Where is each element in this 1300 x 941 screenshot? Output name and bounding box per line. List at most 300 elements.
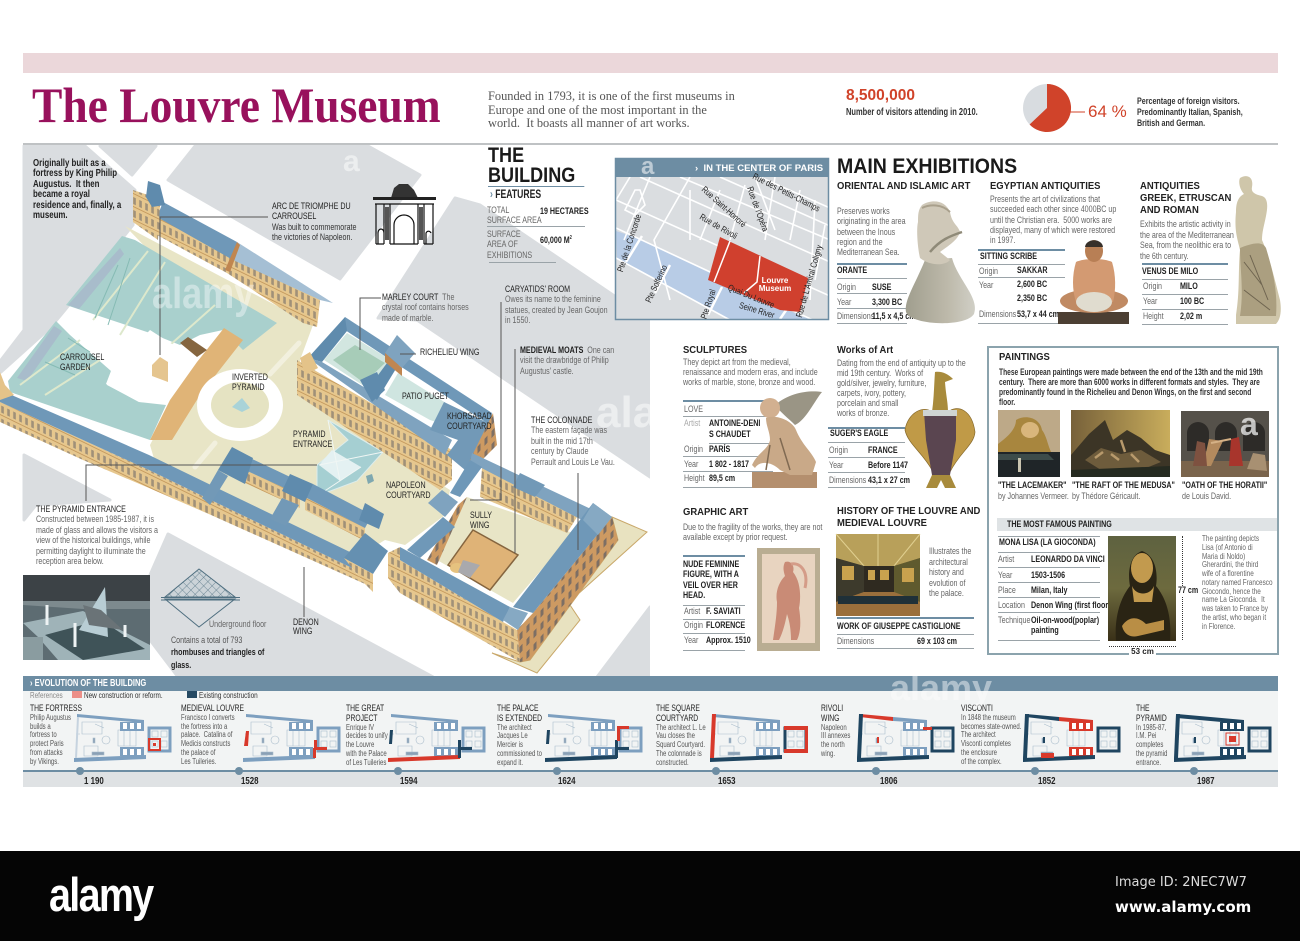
footer url: www.alamy.com: [1115, 898, 1251, 916]
step: Visconti: In 1848 the museum: [961, 713, 1016, 722]
caption: The Lacemaker: by Johannes Vermeer.: [998, 491, 1069, 502]
step: Rivoli Wing: the north: [821, 740, 845, 749]
foreign visitors note: Predominantly Italian, Spanish,: [1137, 107, 1243, 118]
year 1594: 1594: [400, 775, 418, 787]
panel: Oriental and Islamic art: 3,300 BC: [872, 297, 902, 308]
note: fortress origin: museum.: [33, 209, 68, 221]
label: Patio Puget: PATIO PUGET: [402, 391, 449, 402]
pie chart: 64% foreign visitors: [1023, 84, 1085, 132]
label: Inverted Pyramid: INVERTED: [232, 372, 268, 383]
label: Khorsabad Courtyard: COURTYARD: [447, 421, 491, 432]
paintings intro: These European paintings were made between the end of the 13th and the mid 19th: [999, 367, 1263, 377]
dimension: 53 cm: 53 cm: [1131, 647, 1154, 656]
label: Napoleon Courtyard: COURTYARD: [386, 490, 430, 501]
map labels: Seine River: [738, 300, 776, 321]
panel: Egyptian antiquities: Year: [979, 280, 993, 291]
label: Pyramid Entrance: PYRAMID: [293, 429, 325, 440]
label: Arc de Triomphe du Carrousel: ARC DE TRIOMPHE DU: [272, 201, 351, 212]
caption: The Raft of the Medusa: [1072, 480, 1175, 502]
panel: Oriental and Islamic art: originating in the area: [837, 216, 906, 227]
panel: Works of Art: mid 19th century. Works of: [837, 368, 923, 379]
label: Marley Court: made of marble.: [382, 313, 433, 324]
label: Carrousel Garden: GARDEN: [60, 362, 90, 373]
Mona Lisa data table: painting: [1031, 625, 1059, 636]
map labels: Quai Du Louvre: [726, 283, 776, 310]
step: The Pyramid: In 1985-87,: [1136, 723, 1166, 732]
label: The Colonnade: built in the mid 17th: [531, 436, 593, 447]
step: The Great Project: decides to unify: [346, 731, 388, 740]
step: The Palace is Extended: [497, 704, 542, 768]
step: The Palace is Extended: Jacques Le: [497, 731, 528, 740]
Carrousel garden: [8, 236, 277, 440]
step: Medieval Louvre: Medicis constructs: [181, 739, 230, 748]
heading: The Building: BUILDING: [488, 164, 575, 187]
step: Medieval Louvre: palace. Catalina of: [181, 730, 232, 739]
legend: Existing construction: [199, 691, 258, 700]
panel: History of the Louvre: architectural: [929, 557, 968, 568]
caption: The Raft of the Medusa: by Thédore Géricault.: [1072, 491, 1140, 502]
step: The Palace is Extended: IS EXTENDED: [497, 713, 542, 723]
step: The Pyramid: the pyramid: [1136, 749, 1167, 758]
glass pyramid: [317, 420, 383, 496]
step: The Pyramid: entrance.: [1136, 758, 1161, 767]
cutaway illustration of the Louvre: [0, 145, 650, 676]
statue: Venus de Milo: [1236, 176, 1281, 324]
panel: Graphic Art: F. SAVIATI: [706, 606, 741, 617]
panel: Sculptures: renaissance and modern eras, and include: [683, 367, 818, 378]
label: The Colonnade: century by Claude: [531, 446, 588, 457]
painting: The Raft of the Medusa: [1071, 410, 1170, 477]
panel: Oriental and Islamic art: Year: [837, 297, 851, 308]
foreign visitors note: Percentage of foreign visitors.: [1137, 96, 1240, 107]
panel: Antiquities Greek, Etruscan and Roman: MILO: [1180, 281, 1198, 292]
label: Caryatids' Room: statues, created by Jean Goujon: [505, 305, 608, 316]
panel: Graphic Art: Year: [684, 635, 698, 646]
watermark: ala (right of building): ala: [596, 388, 657, 437]
label: Napoleon Courtyard: [386, 480, 430, 501]
panel: Works of Art: Works of Art: [837, 344, 893, 356]
label: Marley Court: crystal roof contains horses: [382, 302, 469, 313]
step: Rivoli Wing: RIVOLI: [821, 703, 843, 713]
intro text: Founded in 1793, it is one of the first museums in: [488, 89, 735, 103]
panel: Works of Art: carpets, ivory, pottery,: [837, 388, 906, 399]
label: The Colonnade: [531, 415, 615, 468]
panel: Graphic Art: VEIL OVER HER: [683, 580, 738, 591]
step: Rivoli Wing: III annexes: [821, 731, 850, 740]
panel: Sculptures: LOVE: [684, 404, 703, 415]
features table: › FEATURES: [490, 189, 541, 201]
panel: History of the Louvre: evolution of: [929, 578, 965, 589]
panel: Paintings: [987, 346, 1279, 655]
Mona Lisa data table: Artist: [998, 554, 1014, 565]
label: Caryatids' Room: CARYATIDS' ROOM: [505, 284, 570, 295]
panel: Graphic Art: FLORENCE: [706, 620, 745, 631]
icon: triumphal arch: [373, 184, 436, 245]
watermark: alamy (building): alamy: [152, 269, 254, 318]
panel: Antiquities Greek, Etruscan and Roman: ANTIQUITIES: [1140, 180, 1200, 192]
panel: Graphic Art: GRAPHIC ART: [683, 506, 748, 518]
label: Marley Court: [382, 292, 469, 324]
step: The Great Project: PROJECT: [346, 713, 378, 723]
locator map: [614, 158, 830, 321]
step: The Palace is Extended: commissioned to: [497, 749, 542, 758]
panel: Antiquities Greek, Etruscan and Roman: VENUS DE MILO: [1142, 266, 1198, 277]
map labels: Rue de Rivoli: [698, 212, 739, 241]
features table: 19 HECTARES: [540, 206, 589, 217]
step: The Square Courtyard: The architect L. Le: [656, 723, 706, 732]
title: The Louvre Museum: [32, 77, 441, 133]
panel: History of the Louvre: WORK OF GIUSEPPE CASTIGLIONE: [837, 621, 961, 632]
step: The Fortress: builds a: [30, 722, 51, 731]
step: The Square Courtyard: The colonnade is: [656, 749, 702, 758]
label: Inverted Pyramid: PYRAMID: [232, 382, 264, 393]
callout lines: [86, 217, 578, 617]
pie percentage: 64 %: [1088, 102, 1127, 121]
label: Carrousel Garden: [60, 352, 104, 373]
panel: History of the Louvre: history and: [929, 567, 964, 578]
map labels: Louvre: [762, 276, 789, 285]
panel: Graphic Art: [683, 506, 822, 651]
panel: Sculptures: 89,5 cm: [709, 473, 735, 484]
Mona Lisa data table: 1503-1506: [1031, 570, 1065, 581]
step: The Pyramid: [1136, 704, 1167, 768]
Seine river: [616, 231, 808, 319]
step: Medieval Louvre: the fortress into a: [181, 722, 227, 731]
panel: Oriental and Islamic art: Preserves works: [837, 206, 890, 217]
footer band: [0, 851, 1300, 941]
label: Pyramid Entrance: ENTRANCE: [293, 439, 332, 450]
panel: Works of Art: Origin: [829, 445, 848, 456]
map labels: Rue des Petits-Champs: [751, 171, 822, 214]
panel: Egyptian antiquities: displayed, many of which were restored: [990, 225, 1115, 236]
paintings intro: century. There are more than 6000 works in different formats and styles. They are: [999, 377, 1260, 387]
panel: Egyptian antiquities: SITTING SCRIBE: [980, 251, 1037, 262]
step: The Square Courtyard: constructed.: [656, 758, 689, 767]
intro text: [488, 89, 735, 130]
panel: Egyptian antiquities: Dimensions: [979, 309, 1016, 320]
plan: 1624: [545, 714, 641, 762]
label: The Pyramid Entrance: reception area below.: [36, 556, 104, 567]
step: The Palace is Extended: expand it.: [497, 758, 523, 767]
Mona Lisa description: Lisa (of Antonio di: [1202, 542, 1253, 552]
step: Medieval Louvre: [181, 704, 244, 767]
step: Medieval Louvre: Francisco I converts: [181, 713, 235, 722]
header bar: [23, 53, 1278, 73]
watermark: a (top block): a: [343, 145, 360, 178]
panel: Sculptures: Artist: [684, 418, 700, 429]
Mona Lisa data table: Place: [998, 585, 1016, 596]
panel: Sculptures: Year: [684, 459, 698, 470]
panel: Works of Art: gold/silver, jewelry, furniture,: [837, 378, 926, 389]
grey city blocks: [1, 146, 650, 677]
step: The Fortress: THE FORTRESS: [30, 703, 82, 713]
panel: Works of Art: 43,1 x 27 cm: [868, 475, 910, 486]
note: rhombuses: Contains a total of 793: [171, 635, 242, 646]
panel: Oriental and Islamic art: Dimensions: [837, 311, 874, 322]
heading: The Building: [488, 146, 584, 187]
panel: Sculptures: [683, 344, 818, 488]
map labels: Pte de la Concorde: [615, 213, 644, 273]
label: Inverted Pyramid: [232, 372, 268, 393]
step: The Pyramid: THE: [1136, 703, 1150, 713]
visitors statistic: 8,500,000: [846, 87, 915, 104]
panel: Antiquities Greek, Etruscan and Roman: Sea, from the neolithic era to: [1140, 240, 1231, 251]
map header: › IN THE CENTER OF PARIS: [695, 163, 823, 174]
panel: Egyptian antiquities: [978, 180, 1116, 324]
paintings intro: predominantly found in the Richelieu and Denon Wings, on the first and second: [999, 387, 1251, 397]
features table: TOTAL: [487, 205, 509, 216]
footer image id: Image ID: 2NEC7W7: [1115, 875, 1247, 890]
panel: Antiquities Greek, Etruscan and Roman: [1140, 180, 1234, 325]
step: The Pyramid: PYRAMID: [1136, 713, 1167, 723]
label: Napoleon Courtyard: NAPOLEON: [386, 480, 426, 491]
features table: SURFACE: [487, 229, 521, 240]
step: The Fortress: from attacks: [30, 748, 63, 757]
features table: [487, 189, 589, 263]
heading: Main Exhibitions: MAIN EXHIBITIONS: [837, 155, 1017, 178]
caption: The Raft of the Medusa: "THE RAFT OF THE MEDUSA": [1072, 480, 1175, 491]
panel: Antiquities Greek, Etruscan and Roman: 2,02 m: [1180, 311, 1202, 322]
heading: Paintings: PAINTINGS: [999, 351, 1050, 363]
watermark: a (map header): a: [641, 153, 654, 180]
label: The Colonnade: The eastern façade was: [531, 425, 607, 436]
Richelieu wing: [297, 317, 497, 490]
Mona Lisa description: Giocondo, hence the: [1202, 586, 1261, 596]
label: Denon Wing: WING: [293, 626, 312, 637]
panel: Graphic Art: Approx. 1510: [706, 635, 751, 646]
step: The Great Project: THE GREAT: [346, 703, 384, 713]
step: The Palace is Extended: THE PALACE: [497, 703, 539, 713]
Mona Lisa data table: Oil-on-wood(poplar): [1031, 615, 1099, 626]
year 1806: 1806: [880, 775, 898, 787]
caption: Oath of the Horatii: "OATH OF THE HORATII": [1182, 480, 1267, 491]
label: Medieval Moats: Augustus' castle.: [520, 366, 574, 377]
step: The Pyramid: I.M. Pei: [1136, 731, 1156, 740]
panel: History of the Louvre: HISTORY OF THE LOUVRE AND: [837, 505, 980, 517]
panel: Antiquities Greek, Etruscan and Roman: Origin: [1143, 281, 1162, 292]
step: Visconti: of the complex.: [961, 757, 1002, 766]
panel: History of the Louvre: Dimensions: [837, 636, 874, 647]
Mona Lisa data table: Technique: [998, 615, 1030, 626]
visitors note: Number of visitors attending in 2010.: [846, 107, 978, 118]
panel: History of the Louvre: [837, 505, 980, 649]
panel: Oriental and Islamic art: [837, 180, 970, 324]
year 1987: 1987: [1197, 775, 1215, 787]
panel: Works of Art: porcelain and small: [837, 398, 898, 409]
step: The Square Courtyard: THE SQUARE: [656, 703, 700, 713]
panel: Graphic Art: NUDE FEMININE: [683, 559, 739, 570]
step: Medieval Louvre: Les Tuileries.: [181, 757, 216, 766]
label: Khorsabad Courtyard: KHORSABAD: [447, 411, 492, 422]
panel: Egyptian antiquities: succeeded each other since 4000BC up: [990, 204, 1116, 215]
label: underground floor: Underground floor: [209, 619, 266, 630]
artefact: Suger's Eagle: [904, 372, 976, 488]
label: The Pyramid Entrance: THE PYRAMID ENTRANCE: [36, 504, 126, 515]
panel: Oriental and Islamic art: Mediterranean Sea.: [837, 247, 900, 258]
step: Rivoli Wing: [821, 704, 850, 759]
step: The Fortress: protect Paris: [30, 739, 64, 748]
plan: 1528: [243, 714, 339, 762]
Mona Lisa data table: [998, 536, 1100, 641]
panel: Oriental and Islamic art: SUSE: [872, 282, 891, 293]
step: Medieval Louvre: MEDIEVAL LOUVRE: [181, 703, 244, 713]
plan: 1594: [388, 714, 484, 762]
panel: Oriental and Islamic art: ORANTE: [837, 265, 867, 276]
map labels: Pte Solferino: [643, 263, 670, 304]
label: Denon Wing: [293, 617, 319, 637]
features table: EXHIBITIONS: [487, 250, 532, 261]
map labels: Rue de L'Amiral Coligny: [794, 243, 825, 319]
step: The Great Project: Enrique IV: [346, 723, 374, 732]
drawing: nude feminine figure: [757, 548, 820, 651]
label: Pyramid Entrance: [293, 429, 332, 450]
map labels: Rue de l'Opéra: [745, 185, 771, 233]
step: Rivoli Wing: wing.: [821, 749, 835, 758]
step: The Great Project: [346, 704, 388, 768]
note: fortress origin: Originally built as a: [33, 157, 106, 169]
foreign visitors note: [1137, 96, 1243, 129]
label: The Pyramid Entrance: view of the historical buildings, while: [36, 535, 150, 546]
features table: AREA OF: [487, 239, 518, 250]
step: Visconti: the enclosure: [961, 748, 997, 757]
statue: Orante: [906, 201, 975, 324]
panel: Sculptures: Origin: [684, 444, 703, 455]
panel: Egyptian antiquities: Origin: [979, 266, 998, 277]
label: Arc de Triomphe du Carrousel: [272, 201, 356, 243]
panel: Oriental and Islamic art: 11,5 x 4,5 cm: [872, 311, 916, 322]
panel: History of the Louvre: Illustrates the: [929, 546, 971, 557]
caption: The Lacemaker: "THE LACEMAKER": [998, 480, 1067, 491]
legend: New construction or reform.: [84, 691, 163, 700]
label: Arc de Triomphe du Carrousel: Was built to commemorate: [272, 222, 356, 233]
label: The Pyramid Entrance: Constructed between 1985-1987, it is: [36, 514, 154, 525]
caption: Oath of the Horatii: de Louis David.: [1182, 491, 1231, 502]
plan: 1987: [1174, 714, 1270, 762]
panel: Works of Art: works of bronze.: [837, 408, 889, 419]
watermark: a (Horatii): a: [1240, 406, 1258, 442]
label: The Colonnade: Perrault and Louis Le Vau.: [531, 457, 615, 468]
painting: Mona Lisa: [1108, 536, 1176, 641]
watermark: alamy (evolution bar): alamy: [890, 667, 992, 708]
step: The Square Courtyard: COURTYARD: [656, 713, 698, 723]
step: The Great Project: of Les Tuileries: [346, 758, 386, 767]
evolution heading bar: [23, 676, 1278, 691]
Mona Lisa data table: Denon Wing (first floor): [1031, 600, 1110, 611]
panel: Egyptian antiquities: until the Christian era. 5000 works are: [990, 215, 1112, 226]
dimension: 77 cm: 77 cm: [1178, 585, 1198, 596]
panel: Graphic Art: HEAD.: [683, 590, 705, 601]
panel: Oriental and Islamic art: between the Inous: [837, 227, 895, 238]
panel: Works of Art: Dating from the end of antiquity up to the: [837, 358, 966, 369]
panel: Egyptian antiquities: in 1997.: [990, 235, 1015, 246]
label: Denon Wing: DENON: [293, 617, 319, 628]
panel: Graphic Art: Due to the fragility of the works, they are not: [683, 522, 822, 533]
Mona Lisa data table: Milan, Italy: [1031, 585, 1067, 596]
year 1190: 1 190: [84, 775, 104, 787]
panel: Antiquities Greek, Etruscan and Roman: Year: [1143, 296, 1157, 307]
panel: Egyptian antiquities: 2,350 BC: [1017, 293, 1047, 304]
section bar: the most famous painting: [997, 518, 1277, 531]
step: The Square Courtyard: [656, 704, 706, 768]
photo: pyramid fountains: [23, 575, 150, 660]
step: The Fortress: by Vikings.: [30, 757, 59, 766]
panel: Oriental and Islamic art: ORIENTAL AND ISLAMIC ART: [837, 180, 970, 192]
panel: Oriental and Islamic art: region and the: [837, 237, 883, 248]
diagram: pyramid section: [161, 568, 240, 628]
note: fortress origin: fortress by King Philip: [33, 167, 117, 179]
evolution panel background: [23, 691, 1278, 787]
central plaza: [107, 328, 243, 440]
step: Visconti: becomes state-owned.: [961, 722, 1021, 731]
plan: 1806: [857, 714, 953, 762]
map header: [615, 158, 829, 177]
Mona Lisa description: name La Gioconda. It: [1202, 594, 1265, 604]
step: Visconti: [961, 704, 1021, 767]
step: The Palace is Extended: The architect: [497, 723, 532, 732]
panel: Works of Art: Year: [829, 460, 843, 471]
panel: History of the Louvre: 69 x 103 cm: [917, 636, 957, 647]
year 1653: 1653: [718, 775, 736, 787]
panel: Antiquities Greek, Etruscan and Roman: 100 BC: [1180, 296, 1204, 307]
note: rhombuses: [171, 635, 264, 671]
evolution heading bar: › EVOLUTION OF THE BUILDING: [30, 678, 146, 689]
step: Visconti: The architect: [961, 730, 996, 739]
label: Medieval Moats: visit the drawbridge of Philip: [520, 355, 609, 366]
panel: Sculptures: works of marble, stone, bronze and wood.: [683, 377, 815, 388]
label: Sully Wing: SULLY: [470, 510, 492, 521]
label: The Pyramid Entrance: [36, 504, 158, 567]
moat platform: [492, 517, 647, 673]
panel: Works of Art: FRANCE: [868, 445, 898, 456]
panel: Egyptian antiquities: SAKKAR: [1017, 265, 1047, 276]
step: The Fortress: [30, 704, 82, 767]
label: Caryatids' Room: [505, 284, 608, 326]
label: Caryatids' Room: in 1550.: [505, 315, 530, 326]
note: fortress origin: residence and, finally, a: [33, 199, 121, 211]
map labels: [615, 171, 825, 321]
Louvre block: [708, 237, 808, 312]
footer logo: alamy: alamy: [49, 868, 153, 921]
Mona Lisa description: in Florence.: [1202, 620, 1235, 630]
foreign visitors note: British and German.: [1137, 118, 1205, 129]
legend: References: [30, 691, 63, 700]
map labels: Rue Saint-Honoré: [700, 184, 748, 230]
step: Rivoli Wing: WING: [821, 713, 839, 723]
step: The Great Project: the Louvre: [346, 740, 374, 749]
label: The Colonnade: THE COLONNADE: [531, 415, 592, 426]
painting: gallery by Castiglione: [836, 534, 920, 616]
Mona Lisa data table: Location: [998, 600, 1025, 611]
step: The Pyramid: completes: [1136, 740, 1163, 749]
statue: Sitting Scribe: [1058, 240, 1129, 324]
year 1528: 1528: [241, 775, 259, 787]
panel: Works of Art: SUGER'S EAGLE: [830, 428, 888, 439]
label: Marley Court: MARLEY COURT The: [382, 292, 454, 303]
note: rhombuses: rhombuses and triangles of: [171, 647, 264, 658]
caption: The Lacemaker: [998, 480, 1069, 502]
intro text: Europe and one of the most important in the: [488, 103, 707, 117]
step: Visconti: VISCONTI: [961, 703, 993, 713]
section bar: the most famous painting: THE MOST FAMOUS PAINTING: [1007, 519, 1112, 530]
note: rhombuses: glass.: [171, 660, 191, 671]
panel: Egyptian antiquities: 53,7 x 44 cm: [1017, 309, 1059, 320]
year strip: [23, 772, 1278, 787]
panel: Egyptian antiquities: Presents the art of civilizations that: [990, 194, 1100, 205]
label: Arc de Triomphe du Carrousel: CARROUSEL: [272, 211, 316, 222]
north wing: [133, 181, 333, 327]
panel: Sculptures: ANTOINE-DENI: [709, 418, 760, 429]
panel: Antiquities Greek, Etruscan and Roman: GREEK, ETRUSCAN: [1140, 192, 1231, 204]
